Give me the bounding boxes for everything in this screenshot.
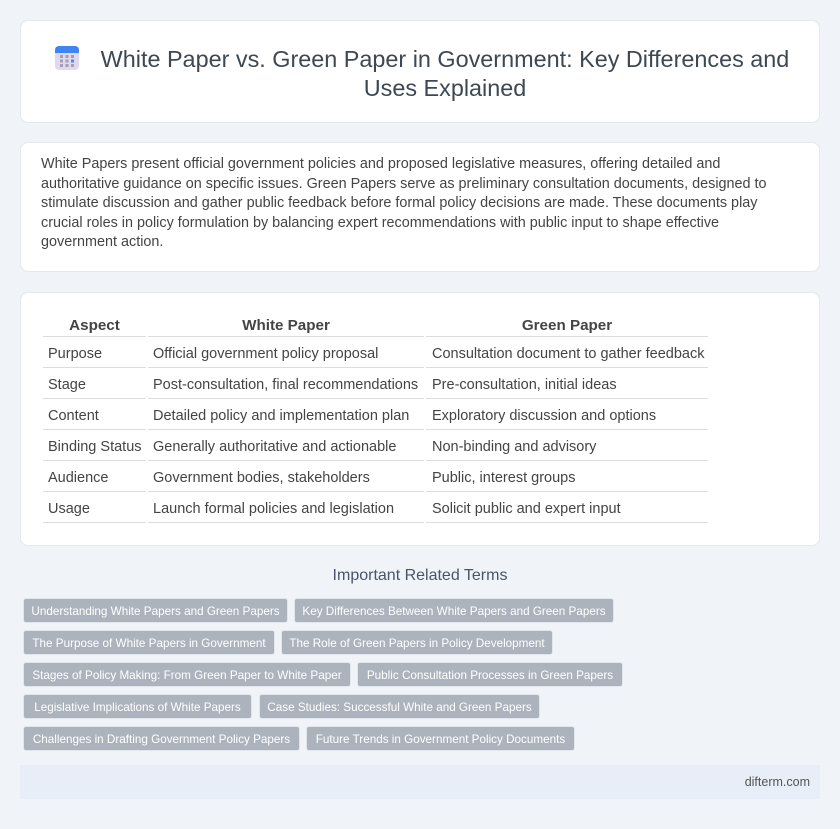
comparison table: Exploratory discussion and options bbox=[432, 408, 656, 424]
footer credit: difterm.com bbox=[745, 775, 810, 789]
comparison table: Generally authoritative and actionable bbox=[153, 438, 396, 454]
related terms tags: Public Consultation Processes in Green Papers bbox=[367, 669, 613, 682]
intro text: authoritative guidance on specific issues. Green Papers serve as preliminary consultation documents, designed to bbox=[41, 176, 767, 192]
panel: comparison table bbox=[20, 292, 820, 546]
comparison table: Government bodies, stakeholders bbox=[153, 470, 370, 486]
related terms tags: Challenges in Drafting Government Policy Papers bbox=[33, 733, 290, 746]
comparison table: Solicit public and expert input bbox=[432, 500, 621, 516]
title bbox=[100, 46, 789, 101]
comparison table: Content bbox=[48, 408, 99, 424]
comparison table: Detailed policy and implementation plan bbox=[153, 408, 409, 424]
related terms tags bbox=[23, 598, 623, 751]
comparison table: Post-consultation, final recommendations bbox=[153, 376, 418, 392]
comparison table: Pre-consultation, initial ideas bbox=[432, 376, 617, 392]
comparison table: Green Paper bbox=[522, 317, 612, 334]
comparison table: Non-binding and advisory bbox=[432, 438, 596, 454]
intro text: government action. bbox=[41, 234, 163, 250]
related terms tags: Stages of Policy Making: From Green Paper to White Paper bbox=[32, 669, 342, 682]
comparison table: Stage bbox=[48, 376, 86, 392]
comparison table: Launch formal policies and legislation bbox=[153, 500, 394, 516]
related terms heading: Important Related Terms bbox=[333, 567, 507, 584]
comparison table: Purpose bbox=[48, 346, 102, 362]
comparison table: Binding Status bbox=[48, 438, 142, 454]
panel: intro paragraph bbox=[20, 142, 820, 272]
intro text: White Papers present official government policies and proposed legislative measures, offering detailed and bbox=[41, 156, 720, 172]
intro text: crucial roles in policy formulation by balancing expert recommendations with public input to shape effective bbox=[41, 214, 719, 230]
comparison table: Aspect bbox=[69, 317, 120, 334]
intro text bbox=[41, 156, 767, 250]
related terms tags: Key Differences Between White Papers and Green Papers bbox=[302, 605, 606, 618]
title: White Paper vs. Green Paper in Government: Key Differences and bbox=[101, 46, 789, 72]
related terms tags: Future Trends in Government Policy Documents bbox=[316, 733, 565, 746]
related terms tags: Legislative Implications of White Papers bbox=[34, 701, 241, 714]
comparison table: Audience bbox=[48, 470, 108, 486]
related terms tags: The Role of Green Papers in Policy Development bbox=[289, 637, 545, 650]
comparison table: Public, interest groups bbox=[432, 470, 575, 486]
comparison table: Usage bbox=[48, 500, 90, 516]
related terms tags: The Purpose of White Papers in Government bbox=[32, 637, 266, 650]
intro text: stimulate discussion and gather public feedback before formal policy decisions are made. These documents play bbox=[41, 195, 757, 211]
title: Uses Explained bbox=[364, 74, 526, 100]
panel: header bbox=[20, 20, 820, 123]
related terms tags: Case Studies: Successful White and Green Papers bbox=[267, 701, 532, 714]
comparison table: Official government policy proposal bbox=[153, 346, 378, 362]
footer bar bbox=[20, 765, 820, 799]
icon: calendar bbox=[55, 46, 79, 70]
comparison table: White Paper bbox=[242, 317, 330, 334]
comparison table bbox=[43, 317, 708, 523]
related terms tags: Understanding White Papers and Green Papers bbox=[31, 605, 280, 618]
comparison table: Consultation document to gather feedback bbox=[432, 346, 704, 362]
